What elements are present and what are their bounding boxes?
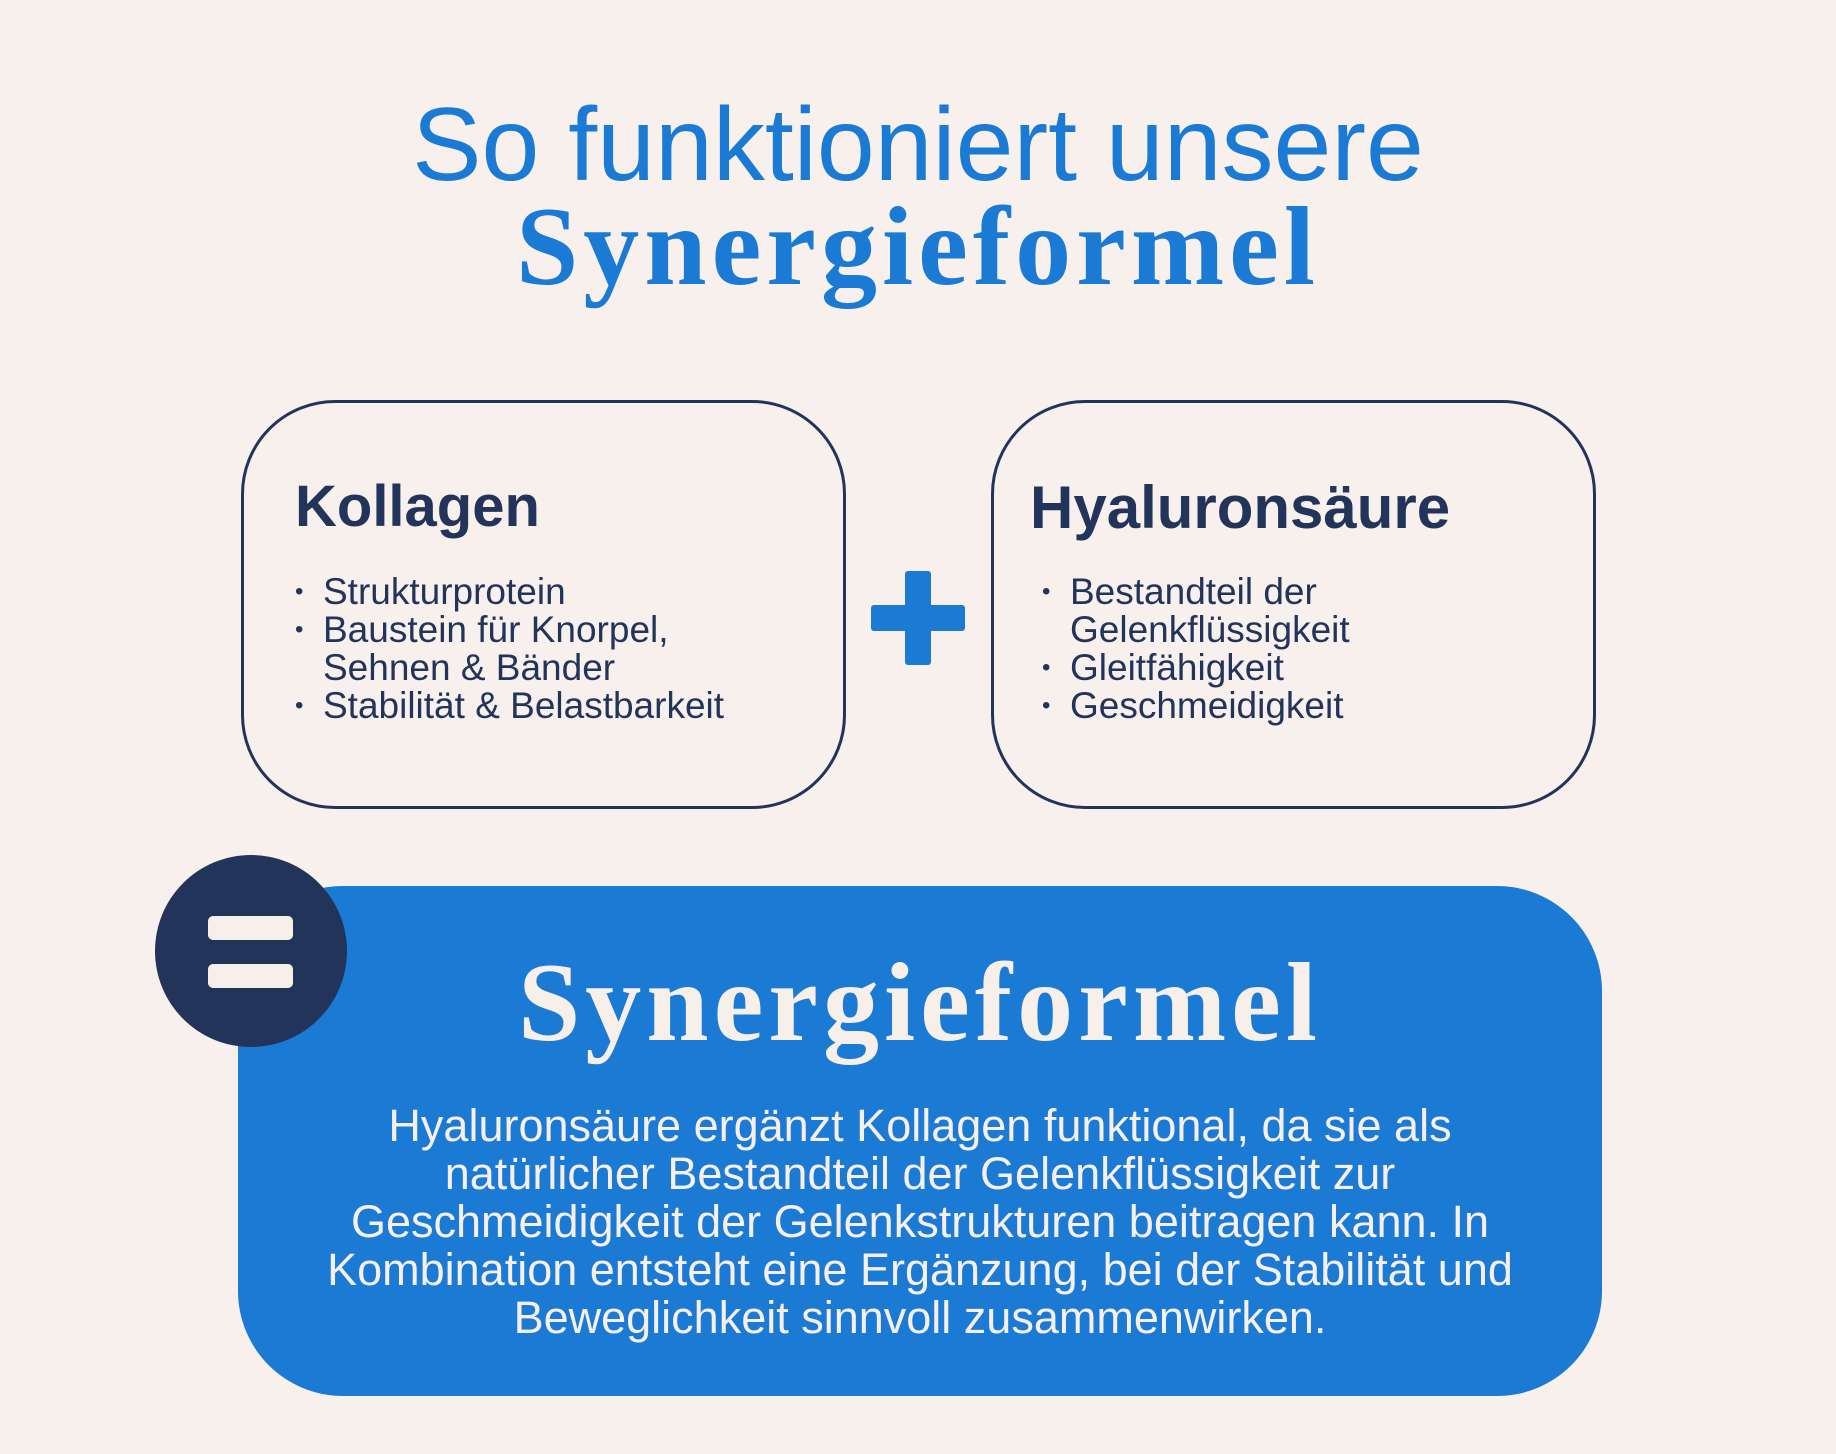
- text: description: [327, 1100, 1513, 1343]
- list: Hyaluronsäure: Geschmeidigkeit: [1070, 685, 1344, 726]
- text: description: Beweglichkeit sinnvoll zusammenwirken.: [514, 1292, 1326, 1343]
- heading: Hyaluronsäure: Hyaluronsäure: [1030, 474, 1450, 541]
- title: [412, 87, 1424, 309]
- heading: Synergieformel: Synergieformel: [518, 941, 1322, 1065]
- list: Kollagen: Baustein für Knorpel,: [323, 609, 669, 650]
- list: Kollagen: [296, 571, 724, 726]
- list: Kollagen: Stabilität & Belastbarkeit: [323, 685, 724, 726]
- heading: Kollagen: Kollagen: [295, 474, 540, 539]
- list: Hyaluronsäure: Bestandteil der: [1070, 571, 1317, 612]
- icon: plus: [871, 571, 965, 665]
- text: description: Kombination entsteht eine Ergänzung, bei der Stabilität und: [327, 1244, 1513, 1295]
- title: So funktioniert unsere: [412, 87, 1424, 203]
- list: Hyaluronsäure: [1042, 571, 1350, 726]
- list: Hyaluronsäure: Gleitfähigkeit: [1070, 647, 1284, 688]
- text: description: Hyaluronsäure ergänzt Kollagen funktional, da sie als: [388, 1100, 1452, 1151]
- text: description: Geschmeidigkeit der Gelenkstrukturen beitragen kann. In: [351, 1196, 1489, 1247]
- panel: Hyaluronsäure: [991, 400, 1596, 809]
- list: Kollagen: Sehnen & Bänder: [323, 647, 615, 688]
- title: Synergieformel: [516, 185, 1320, 309]
- panel: result: [238, 886, 1602, 1396]
- list: Kollagen: Strukturprotein: [323, 571, 566, 612]
- text: description: natürlicher Bestandteil der Gelenkflüssigkeit zur: [445, 1148, 1395, 1199]
- list: Hyaluronsäure: Gelenkflüssigkeit: [1070, 609, 1350, 650]
- icon: equals circle: [155, 855, 347, 1047]
- panel: Kollagen: [241, 400, 846, 809]
